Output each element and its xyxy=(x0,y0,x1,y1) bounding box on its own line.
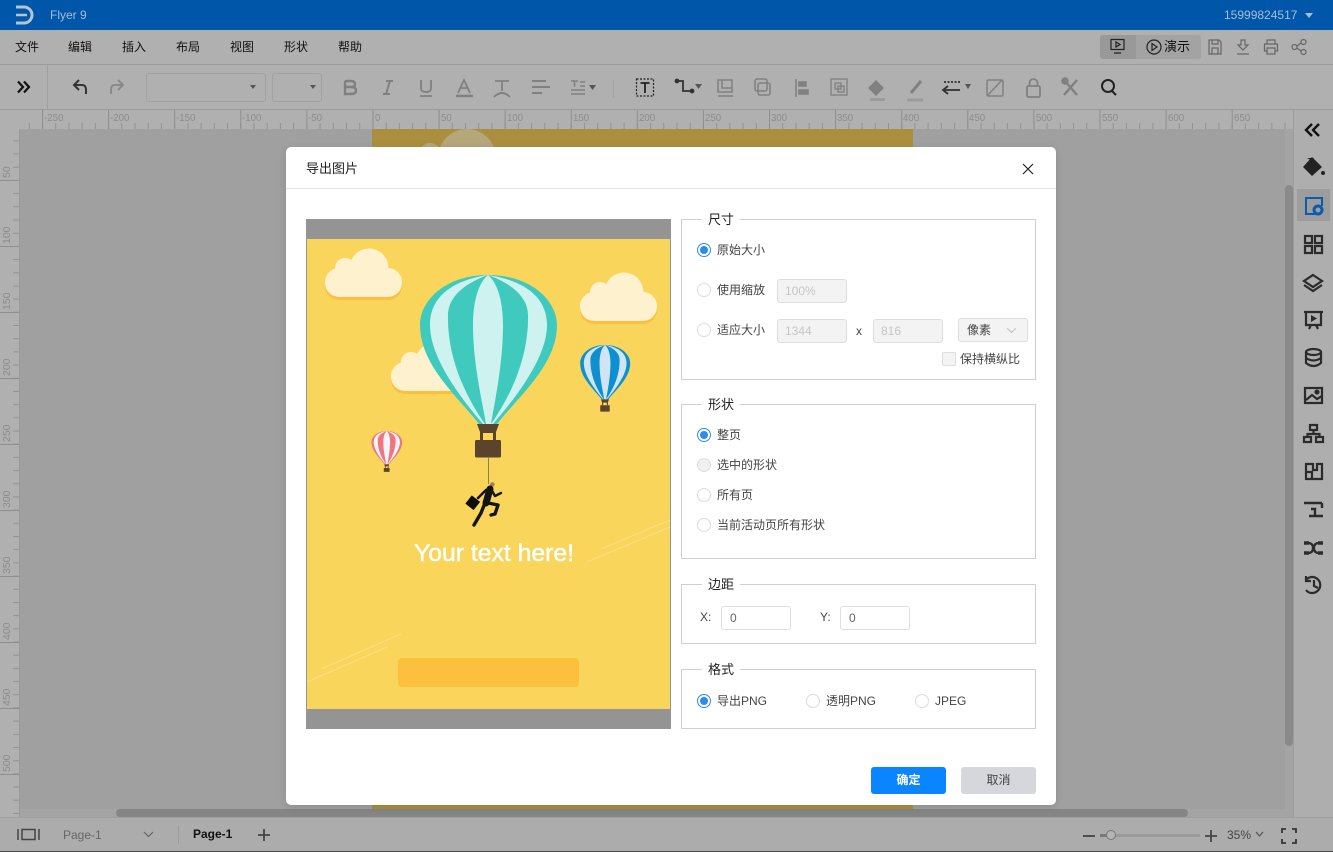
icon: page selector chevron xyxy=(144,832,154,838)
radio: use scale xyxy=(697,283,711,297)
text: 400 xyxy=(903,112,919,124)
present label: 演示 xyxy=(1164,39,1190,54)
radio: original size xyxy=(697,243,711,257)
text: -200 xyxy=(110,112,129,124)
page selector: Page-1 xyxy=(63,828,102,842)
text: 450 xyxy=(969,112,985,124)
text: 300 xyxy=(1,490,13,508)
text: 100 xyxy=(507,112,523,124)
dimmed cloud xyxy=(422,129,494,147)
menu bar xyxy=(0,30,1333,65)
icon: fullscreen xyxy=(1281,828,1297,844)
menu: file: 文件 xyxy=(15,40,39,54)
icon: expand xyxy=(18,82,29,92)
icon: presentation xyxy=(1304,312,1323,329)
button: cancel xyxy=(961,767,1036,794)
checkbox: keep ratio xyxy=(942,352,956,366)
label: JPEG: JPEG xyxy=(935,694,966,708)
fieldset: format xyxy=(681,669,1036,729)
icon: collapse xyxy=(1306,124,1319,136)
toolbar icons xyxy=(17,77,1117,102)
menu: shape: 形状 xyxy=(284,40,308,54)
times sign: x xyxy=(856,324,862,338)
size legend: 尺寸 xyxy=(708,212,734,227)
radio: transparent PNG xyxy=(806,694,820,708)
button: confirm xyxy=(871,767,946,794)
zoom in xyxy=(1205,830,1217,842)
label: selected shapes: 选中的形状 xyxy=(717,458,777,472)
input: X xyxy=(721,606,791,630)
icon: page settings xyxy=(1306,198,1322,214)
icon: crop xyxy=(987,80,1003,96)
document name: Flyer 9 xyxy=(50,8,87,22)
zoom level: 35% xyxy=(1227,828,1251,842)
preview panel xyxy=(306,219,671,729)
select: unit xyxy=(958,318,1028,342)
text: 200 xyxy=(1,358,13,376)
label: whole page: 整页 xyxy=(717,428,741,442)
menu: insert: 插入 xyxy=(122,40,146,54)
canvas area xyxy=(20,129,1285,809)
radio: all pages xyxy=(697,488,711,502)
text: 150 xyxy=(573,112,589,124)
toolbar xyxy=(0,65,1333,110)
icon: add page xyxy=(258,829,270,841)
icon: play xyxy=(1146,39,1162,55)
input: Y xyxy=(840,606,910,630)
export dialog xyxy=(286,147,1056,805)
text: 300 xyxy=(771,112,787,124)
active page tab: Page-1 xyxy=(193,827,232,841)
font family dropdown xyxy=(146,73,266,102)
fieldset: shape xyxy=(681,404,1036,559)
icon: org chart xyxy=(1304,425,1323,442)
menu: help: 帮助 xyxy=(338,40,362,54)
margin legend xyxy=(702,577,740,593)
icon: grid xyxy=(1305,236,1322,253)
flyer button xyxy=(398,658,579,687)
text: 150 xyxy=(1,292,13,310)
input: scale: 100% xyxy=(785,284,816,298)
input: scale xyxy=(777,279,847,303)
title bar xyxy=(0,0,1333,30)
cloud: behind balloon xyxy=(391,342,468,394)
text: 50 xyxy=(441,112,452,124)
icon: print xyxy=(1264,39,1278,55)
pink balloon xyxy=(371,431,402,472)
icon: image xyxy=(1305,388,1322,403)
menu: view: 视图 xyxy=(230,40,254,54)
icon: align objects xyxy=(796,79,808,97)
icon: fill xyxy=(868,80,885,101)
bottom status bar xyxy=(0,817,1333,852)
radio: PNG xyxy=(697,694,711,708)
input: X: 0 xyxy=(730,611,737,625)
select: unit: 像素 xyxy=(967,323,991,337)
icon: tools xyxy=(1062,78,1077,95)
text: 400 xyxy=(1,622,13,640)
input: height: 816 xyxy=(881,324,901,338)
text: 500 xyxy=(1036,112,1052,124)
input: width: 1344 xyxy=(785,324,812,338)
user account: 15999824517 xyxy=(1224,8,1297,22)
text: 250 xyxy=(705,112,721,124)
text: -100 xyxy=(242,112,261,124)
text: 0 xyxy=(375,112,380,124)
icon: line color xyxy=(907,81,923,100)
input: Y: 0 xyxy=(849,611,856,625)
decorative lines: right xyxy=(587,520,670,562)
icon: duplicate xyxy=(755,79,770,95)
label: transparent PNG: 透明PNG xyxy=(826,694,876,708)
icon: history xyxy=(1306,576,1320,593)
icon: text style xyxy=(494,81,510,97)
icon: line style xyxy=(943,82,971,94)
label: PNG: 导出PNG xyxy=(717,694,767,708)
icon: font color xyxy=(456,80,473,96)
zoom out xyxy=(1083,835,1095,837)
icon: connector xyxy=(676,80,702,92)
margin legend: 边距 xyxy=(708,577,734,592)
icon: gantt xyxy=(1304,503,1323,516)
label: X: X: xyxy=(700,610,711,624)
label: all shapes on page: 当前活动页所有形状 xyxy=(717,518,825,532)
running businessman xyxy=(465,482,501,525)
button: cancel: 取消 xyxy=(986,773,1010,787)
icon: zoom chevron xyxy=(1256,832,1264,837)
text: 200 xyxy=(639,112,655,124)
label: use scale: 使用缩放 xyxy=(717,283,765,297)
icon: search xyxy=(1102,80,1116,95)
icon: undo xyxy=(74,80,86,94)
fieldset: margin xyxy=(681,584,1036,644)
icon: app logo xyxy=(16,6,34,24)
fieldset: size xyxy=(681,219,1036,380)
icon: save xyxy=(1208,39,1222,55)
button: confirm: 确定 xyxy=(896,773,920,787)
label: original size: 原始大小 xyxy=(717,243,765,257)
label: all pages: 所有页 xyxy=(717,488,753,502)
icon: close xyxy=(1022,164,1034,174)
radio: whole page xyxy=(697,428,711,442)
zoom slider xyxy=(1100,834,1200,837)
text: 550 xyxy=(1102,112,1118,124)
icon: download xyxy=(1236,39,1250,55)
flyer headline: Your text here! xyxy=(414,540,574,567)
shape legend: 形状 xyxy=(708,397,734,412)
horizontal scrollbar xyxy=(20,809,1293,817)
radio: fit size xyxy=(697,323,711,337)
vertical ruler xyxy=(0,129,20,817)
input: width xyxy=(777,319,847,343)
icon: lock xyxy=(1027,79,1040,97)
text: 450 xyxy=(1,688,13,706)
icon: italic xyxy=(383,81,393,94)
icon: unit chevron xyxy=(1006,328,1016,334)
radio: selected shapes xyxy=(697,458,711,472)
label: keep ratio: 保持横纵比 xyxy=(960,352,1020,366)
icon: line spacing xyxy=(571,81,596,94)
format legend: 格式 xyxy=(708,662,734,677)
format legend xyxy=(702,662,740,678)
present button group xyxy=(1100,35,1201,59)
label: fit size: 适应大小 xyxy=(717,323,765,337)
icon: redo xyxy=(111,80,123,94)
text: 50 xyxy=(1,166,13,178)
dialog title: 导出图片 xyxy=(306,161,358,176)
main teal balloon xyxy=(420,275,557,484)
menu: layout: 布局 xyxy=(176,40,200,54)
text: -50 xyxy=(308,112,322,124)
icon: page list xyxy=(17,828,40,840)
dimmed flyer page xyxy=(372,129,913,809)
text: 350 xyxy=(837,112,853,124)
icon: send to front xyxy=(718,80,733,96)
menu: edit: 编辑 xyxy=(68,40,92,54)
text: -250 xyxy=(44,112,63,124)
icon: underline xyxy=(420,80,432,96)
icon: account caret xyxy=(1305,13,1313,18)
icon: align xyxy=(532,81,550,93)
text: 500 xyxy=(1,754,13,772)
icon: mind map xyxy=(1304,543,1323,553)
icon: share xyxy=(1291,38,1307,56)
text: 650 xyxy=(1234,112,1250,124)
radio: all shapes on page xyxy=(697,518,711,532)
horizontal ruler xyxy=(0,110,1293,130)
text: 600 xyxy=(1168,112,1184,124)
text: 100 xyxy=(1,226,13,244)
side panel icons xyxy=(1302,123,1325,594)
label: Y: Y: xyxy=(820,610,831,624)
right side panel xyxy=(1293,110,1333,817)
icon: floor plan xyxy=(1306,464,1322,479)
cloud: top left xyxy=(325,248,402,300)
icon: layers xyxy=(1304,275,1322,291)
text: 250 xyxy=(1,424,13,442)
blue balloon xyxy=(580,345,630,412)
icon: bold xyxy=(345,81,356,94)
radio: JPEG xyxy=(915,694,929,708)
input: height xyxy=(873,319,943,343)
cloud: top right xyxy=(580,272,657,324)
size legend xyxy=(702,212,740,228)
icon: database xyxy=(1306,349,1321,366)
text: 350 xyxy=(1,556,13,574)
icon: paint bucket xyxy=(1303,157,1325,176)
font size dropdown xyxy=(272,73,322,102)
decorative lines: left xyxy=(307,634,401,682)
icon: group xyxy=(831,79,847,95)
shape legend xyxy=(702,397,740,413)
vertical scrollbar xyxy=(1285,129,1293,809)
icon: slideshow xyxy=(1110,38,1125,54)
text: -150 xyxy=(176,112,195,124)
icon: text box xyxy=(636,79,654,96)
